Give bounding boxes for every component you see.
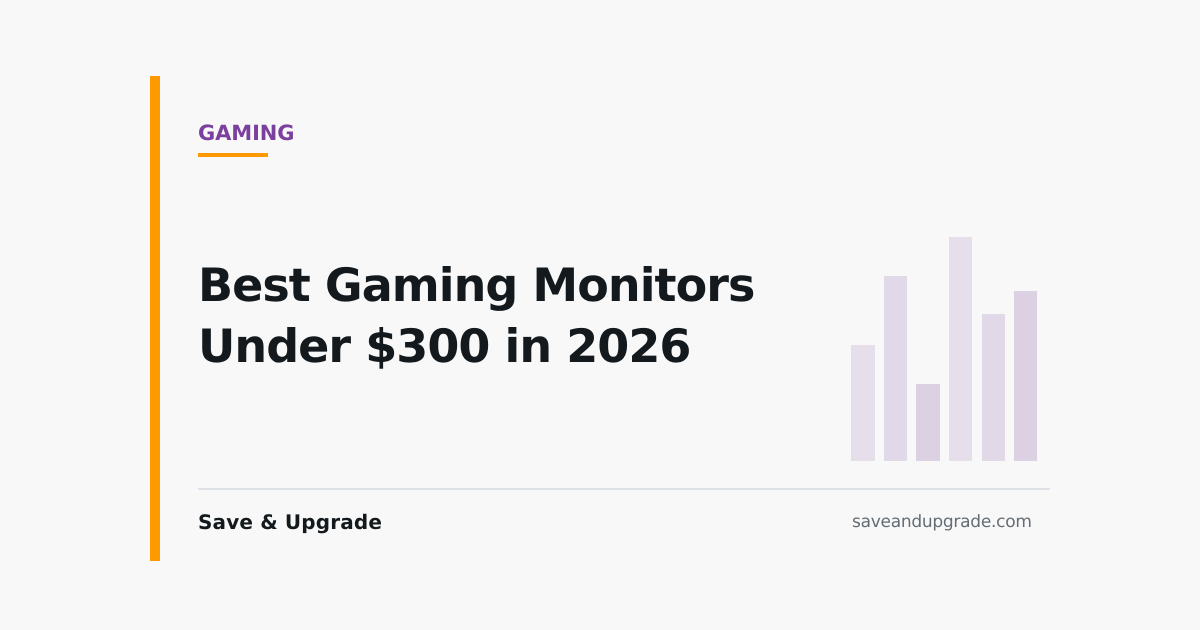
accent bar [150, 76, 160, 561]
brand name: Save & Upgrade [198, 510, 382, 534]
category underline [198, 153, 268, 157]
website url: saveandupgrade.com [852, 512, 1032, 532]
title [198, 258, 754, 373]
title: Under $300 in 2026 [198, 319, 690, 373]
footer divider [198, 488, 1050, 490]
category label: GAMING [198, 121, 294, 145]
title: Best Gaming Monitors [198, 258, 754, 312]
decorative bar chart [851, 237, 1037, 461]
